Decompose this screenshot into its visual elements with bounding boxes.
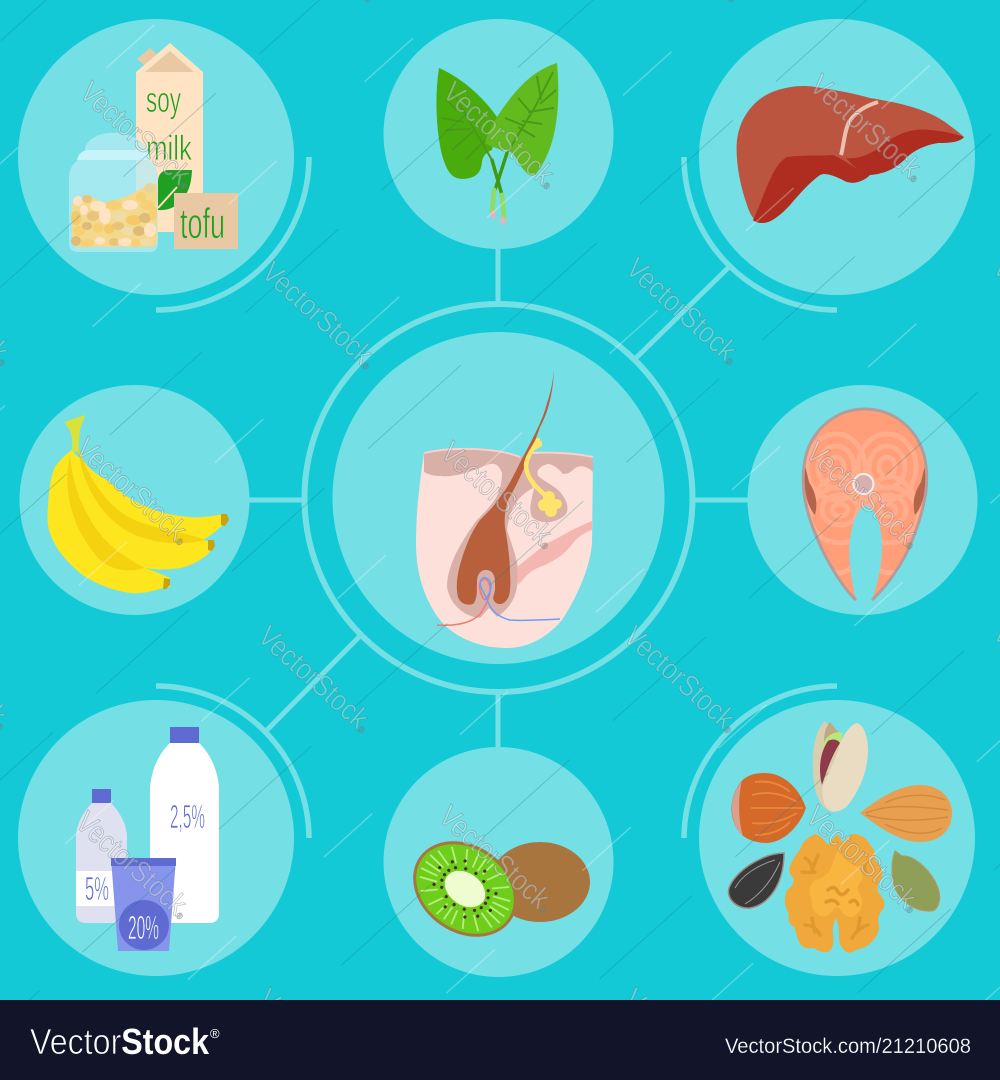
icon: salmon steak (803, 409, 927, 600)
hair shaft and bulb (457, 370, 554, 605)
blue vessel (480, 578, 560, 620)
tofu block (174, 193, 238, 249)
epidermis (424, 450, 533, 618)
arcs around corner circles (156, 157, 837, 838)
dermal papilla (477, 570, 495, 608)
cup (111, 858, 176, 951)
banana stem (64, 415, 85, 452)
kiwi slice (397, 824, 533, 954)
small bottle: 5% (85, 870, 109, 907)
kiwi seeds (421, 847, 509, 931)
icon: liver (737, 86, 964, 223)
watermarks: VectorStock® (619, 252, 747, 371)
left leaf (436, 68, 497, 179)
right leaf (485, 63, 558, 175)
icon: dairy products (76, 727, 219, 951)
watermarks: VectorStock® (69, 806, 197, 925)
liver dark lobes (753, 155, 870, 223)
footer registered mark: ® (210, 1026, 220, 1041)
liver ligament (841, 102, 878, 155)
watermarks: VectorStock® (434, 436, 562, 555)
hazelnut (731, 773, 806, 843)
watermarks: VectorStock® (251, 620, 379, 739)
watermarks: VectorStock® (617, 620, 745, 739)
connectors (248, 248, 750, 750)
circle: liver (699, 19, 975, 295)
circle: greens (384, 19, 614, 249)
circle: nuts (699, 700, 975, 976)
red vessel (437, 579, 490, 625)
circle: center (332, 332, 664, 664)
banana bunch body (47, 450, 228, 593)
large milk bottle (150, 727, 219, 923)
circle: salmon (748, 385, 978, 615)
banana tips (163, 514, 229, 589)
pumpkin seed (892, 851, 940, 911)
carton label: soy: soy (146, 79, 181, 120)
watermarks: VectorStock® (432, 800, 560, 919)
watermarks: VectorStock® (799, 800, 927, 919)
watermarks: VectorStock® (255, 256, 383, 375)
circle: dairy (18, 700, 294, 976)
salmon spine (854, 474, 874, 494)
carton (136, 43, 203, 232)
circle: soy (18, 19, 294, 295)
carton label: milk: milk (146, 129, 192, 168)
ring around center (304, 304, 692, 692)
icon: nuts and seeds (729, 721, 952, 953)
tofu block: tofu (180, 200, 225, 248)
icon: kiwi (397, 824, 590, 954)
watermarks: VectorStock® (799, 436, 927, 555)
carton leaf (158, 170, 192, 210)
pistachio (813, 721, 868, 812)
footer logo: VectorStock (30, 1021, 210, 1062)
arrector pili muscle (517, 521, 592, 585)
leaf veins (441, 72, 556, 160)
circle: banana (20, 385, 250, 615)
jar (69, 133, 158, 252)
kiwi rays (404, 831, 526, 947)
sebaceous gland (526, 439, 562, 517)
footer bar (0, 1000, 1000, 1080)
watermarks: VectorStock® (69, 432, 197, 551)
icon: soy milk carton, jar and tofu (69, 43, 238, 252)
small bottle (76, 789, 127, 923)
salmon outer skin (803, 409, 927, 600)
almond (860, 785, 952, 842)
whole kiwi (490, 842, 590, 922)
salmon rings (807, 434, 920, 573)
stems (492, 153, 507, 222)
watermarks: VectorStock® (73, 76, 201, 195)
icon: hair follicle cross-section (416, 370, 593, 648)
icon: banana bunch (47, 415, 229, 593)
watermarks: VectorStock® (436, 76, 564, 195)
cup: 20% (128, 909, 159, 946)
circle: kiwi (384, 747, 614, 977)
banana darker band one (78, 445, 205, 543)
sunflower seed (729, 853, 784, 908)
watermarks: VectorStock® (803, 69, 931, 188)
banana darker band two (67, 455, 145, 570)
large milk bottle: 2,5% (170, 798, 205, 835)
icon: green leaves (436, 63, 558, 222)
footer url: VectorStock.com/21210608 (725, 1035, 971, 1058)
salmon side dark patches (804, 465, 816, 515)
walnut (785, 834, 884, 953)
skin (416, 449, 593, 648)
kiwi core (438, 863, 492, 915)
